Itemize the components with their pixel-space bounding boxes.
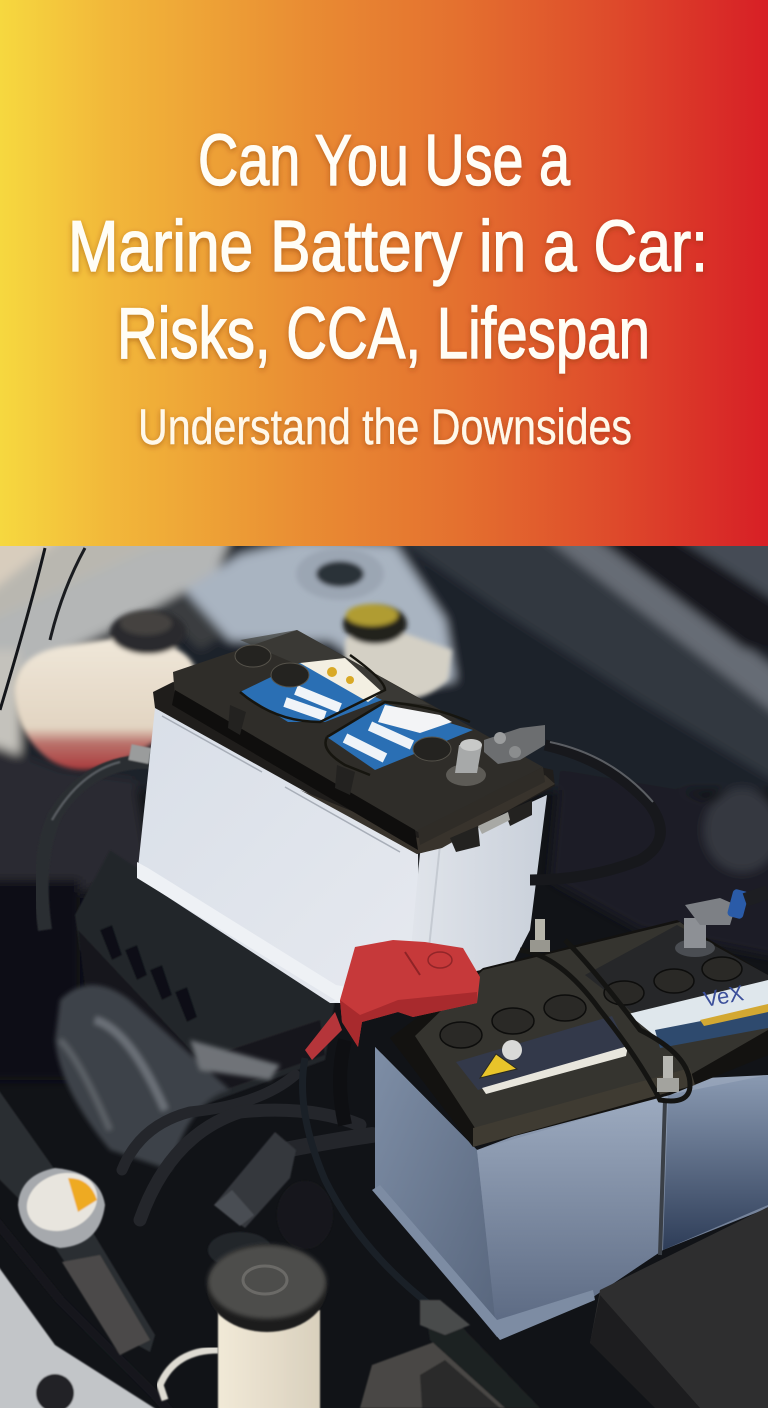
- lower centre grey box: [360, 1300, 540, 1408]
- sticker left: [240, 658, 382, 722]
- handle clips: [228, 705, 532, 852]
- reservoir bottle: [160, 1244, 327, 1408]
- coolant tank: [14, 610, 198, 770]
- red terminal cover: [305, 940, 480, 1060]
- subtitle: Understand the Downsides: [138, 399, 632, 455]
- battery lid rim: [153, 682, 555, 854]
- thin black cable and lead: [302, 1040, 430, 1305]
- title: [68, 121, 708, 374]
- header banner: [0, 0, 768, 546]
- title: Can You Use a: [198, 121, 571, 201]
- main battery: white body: [137, 630, 555, 1003]
- hose left of battery: [42, 752, 150, 930]
- second battery: [372, 888, 768, 1340]
- lower left body panel: [0, 1092, 156, 1408]
- battery lid top: [173, 630, 543, 832]
- washer reservoir cap: [296, 548, 452, 698]
- terminal battery 2: [675, 889, 746, 957]
- warning label: [456, 1016, 628, 1094]
- air box: [75, 850, 335, 1110]
- lower right black box: [590, 1207, 768, 1408]
- strap and bolts: [520, 919, 690, 1101]
- cable clamp: [484, 725, 545, 764]
- hoses lower centre: [122, 1075, 372, 1220]
- sticker right: [327, 703, 473, 770]
- battery cable: [530, 742, 660, 880]
- radiator cap: [18, 1163, 105, 1248]
- battery 2 lid: [468, 920, 734, 1147]
- label vex: VeX: [702, 980, 746, 1012]
- background: blurred upper engine bay: [0, 530, 768, 1080]
- intake manifold: [55, 985, 280, 1170]
- vent caps: [235, 645, 451, 761]
- photo: engine bay: [0, 530, 768, 1408]
- label vex: [628, 980, 768, 1048]
- hose clamp: [208, 1132, 296, 1262]
- vent caps battery 2: [440, 957, 742, 1048]
- terminal post: [446, 739, 486, 786]
- fine wires: [0, 548, 85, 710]
